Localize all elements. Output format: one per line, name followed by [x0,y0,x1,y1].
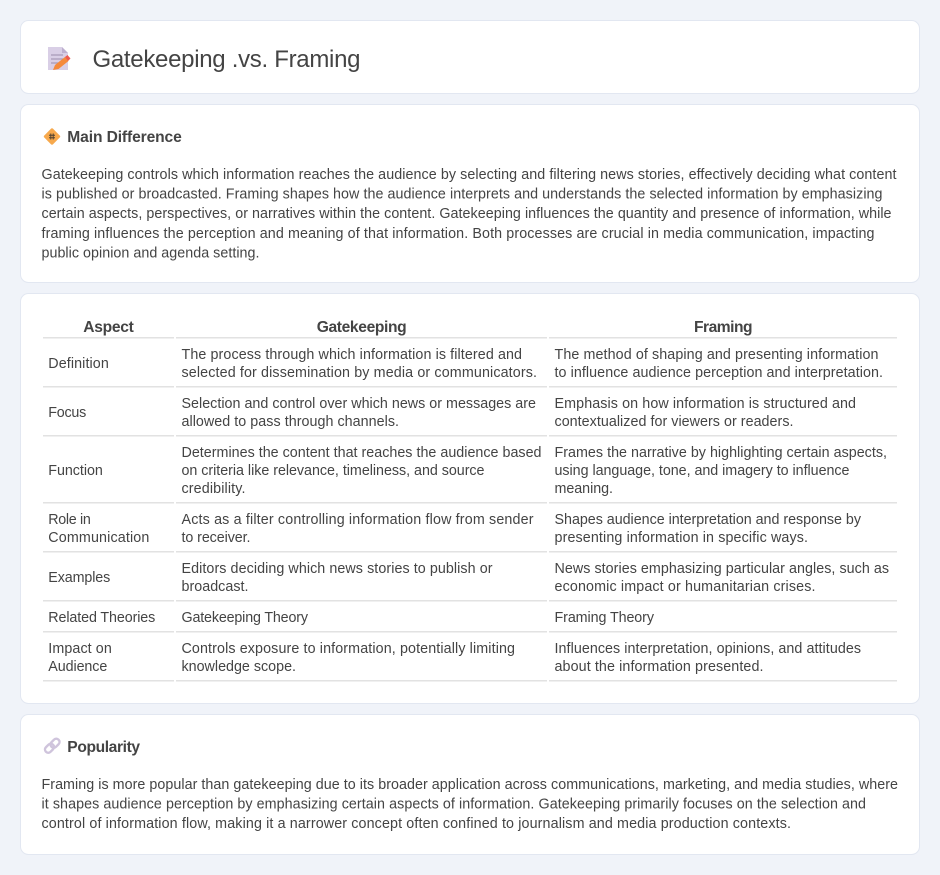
table header row: Gatekeeping [317,319,407,336]
table row: definition: The process through which information is filtered and [182,347,522,363]
table row: focus [43,396,897,436]
table row: impact on audience: Controls exposure to information, potentially limiting [182,641,515,657]
heading: main difference: Main Difference [67,129,182,146]
table row: impact on audience [43,641,897,682]
table row: impact on audience: Audience [48,659,107,675]
table row: related theories: Related Theories [48,610,155,626]
table row: role in communication: Shapes audience interpretation and response by [554,512,862,528]
table row: focus: Selection and control over which news or messages are [182,396,536,412]
table row: function: credibility. [182,481,246,497]
icon: chain link [44,737,61,754]
text block: popularity paragraph [42,777,898,832]
table row: function: on criteria like relevance, timeliness, and source [182,463,485,479]
table row: function: using language, tone, and imagery to influence [554,463,850,479]
table row: function: Function [48,463,103,479]
panel: popularity [20,714,920,854]
table row: definition: Definition [48,356,109,372]
table row: related theories: Framing Theory [554,610,655,626]
table row: definition: to influence audience perception and interpretation. [554,365,883,381]
text block: main difference paragraph: public opinion and agenda setting. [42,245,260,261]
table row: examples: broadcast. [182,579,248,595]
text block: main difference paragraph: is published or broadcasted. Framing shapes how the audience interprets and understands the selected information by emphasizing [42,187,883,203]
table row: role in communication: presenting information in specific ways. [554,530,808,546]
table row: role in communication: Role in [48,512,91,528]
table row: definition: The method of shaping and presenting information [554,347,879,363]
table row: role in communication: to receiver. [182,530,250,546]
table row: examples: News stories emphasizing particular angles, such as [554,561,889,577]
title: Gatekeeping .vs. Framing [92,46,360,73]
table header row: Aspect [83,319,134,336]
table row: role in communication: Communication [48,530,149,546]
text block: main difference paragraph [42,167,897,261]
table row: function: Determines the content that reaches the audience based [182,445,542,461]
table row: focus: Emphasis on how information is structured and [554,396,856,412]
table row: focus: allowed to pass through channels. [182,414,399,430]
text block: main difference paragraph: certain aspects, perspectives, or narratives within the content. Gatekeeping influences the quantity and presence of information, while [42,206,892,222]
table header row: Framing [694,319,752,336]
table row: focus: contextualized for viewers or readers. [554,414,794,430]
table row: impact on audience: Influences interpretation, opinions, and attitudes [554,641,861,657]
table row: focus: Focus [48,405,86,421]
text block: popularity paragraph: control of information flow, making it a narrower concept often confined to journalism and media production contexts. [42,816,791,832]
panel: main difference [20,104,920,282]
icon: warning diamond [43,128,61,145]
text block: main difference paragraph: Gatekeeping controls which information reaches the audience by selecting and filtering news stories, effectively deciding what content [42,167,897,183]
table row: related theories [43,610,897,632]
table row: examples [43,561,897,602]
table row: function [43,445,897,504]
table row: role in communication: Acts as a filter controlling information flow from sender [182,512,534,528]
table row: examples: Examples [48,570,110,586]
table row: definition [43,347,897,388]
icon: memo with pencil [48,47,70,70]
text block: popularity paragraph: Framing is more popular than gatekeeping due to its broader application across communications, marketing, and media studies, where [42,777,898,793]
table row: definition: selected for dissemination by media or communicators. [182,365,537,381]
heading: popularity: Popularity [67,739,140,756]
table row: function: Frames the narrative by highlighting certain aspects, [554,445,887,461]
header panel [20,20,920,94]
text block: popularity paragraph: it shapes audience perception by emphasizing certain aspects of information. Gatekeeping primarily focuses on the selection and [42,797,866,813]
table header row [43,319,897,338]
table row: function: meaning. [554,481,613,497]
table row: examples: economic impact or humanitarian crises. [554,579,816,595]
text block: main difference paragraph: framing influences the perception and meaning of that information. Both processes are crucial in media communication, impacting [42,226,875,242]
table row: related theories: Gatekeeping Theory [182,610,309,626]
table row: impact on audience: Impact on [48,641,112,657]
table row: role in communication [43,512,897,552]
table row: examples: Editors deciding which news stories to publish or [182,561,493,577]
table row: impact on audience: knowledge scope. [182,659,296,675]
table row: impact on audience: about the information presented. [554,659,764,675]
panel: comparison table [20,294,920,704]
